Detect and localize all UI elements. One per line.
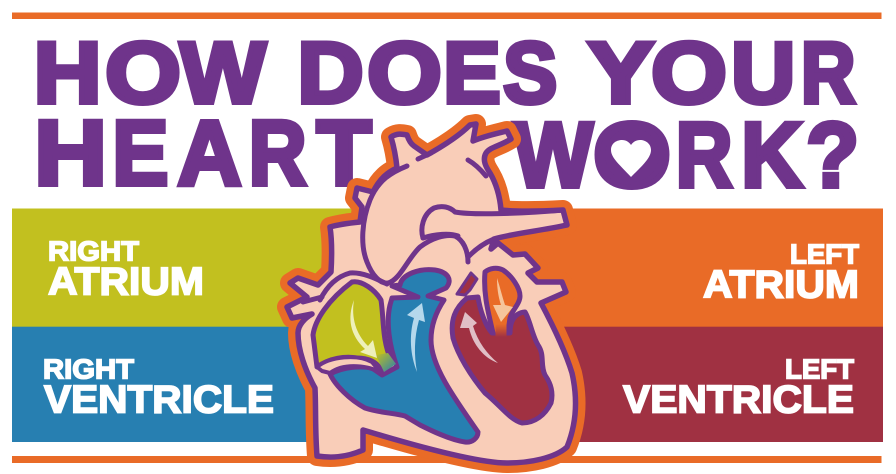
title line two: HEART WORK?: H: [34, 102, 107, 205]
arrow: right ventricle upward: [407, 303, 425, 372]
title line two: HEART WORK?: ?: [806, 103, 859, 206]
title line one: HOW DOES YOUR: E: [443, 26, 501, 122]
top orange rule: [12, 12, 882, 19]
title line one: HOW DOES YOUR: D: [298, 25, 364, 121]
title line one: HOW DOES YOUR: S: [503, 24, 557, 121]
title line two: HEART WORK?: A: [178, 102, 242, 205]
title line one: HOW DOES YOUR: O: [105, 26, 181, 121]
icon: heart inside the letter O: [605, 128, 659, 182]
panel: left atrium: [452, 208, 883, 327]
title line one: HOW DOES YOUR: R: [801, 26, 855, 122]
heart body: [287, 124, 576, 463]
title line one: HOW DOES YOUR: [34, 24, 855, 122]
panel: left ventricle: [452, 327, 883, 442]
arrow: left ventricle upward: [460, 312, 498, 363]
title line one: HOW DOES YOUR: W: [180, 25, 266, 121]
panel: right atrium: ATRIUM: [48, 260, 204, 304]
chamber: left atrium (orange): [485, 268, 520, 337]
panel: left atrium: LEFT: [790, 238, 859, 270]
title line two: HEART WORK?: [34, 101, 859, 207]
title line two: HEART WORK?: T: [317, 102, 371, 205]
heart illustration: [287, 124, 576, 463]
title line one: HOW DOES YOUR: H: [34, 26, 101, 122]
title line two: HEART WORK?: E: [112, 101, 168, 204]
pink tricuspid flap: [317, 357, 381, 373]
panel: right atrium: RIGHT: [48, 236, 139, 266]
title line one: HOW DOES YOUR: O: [367, 26, 442, 121]
title line one: HOW DOES YOUR: Y: [588, 25, 654, 121]
title line two: HEART WORK?: R: [676, 105, 732, 207]
panel: right atrium: [12, 208, 452, 327]
title line two: HEART WORK?: K: [741, 103, 803, 206]
panel: left ventricle: LEFT: [785, 354, 854, 384]
panel: left ventricle: VENTRICLE: [623, 378, 854, 422]
aorta and pulmonary artery outlines: [303, 153, 563, 302]
panel: right ventricle: VENTRICLE: [44, 378, 274, 422]
panel: left atrium: ATRIUM: [703, 264, 859, 306]
chamber: left ventricle (dark red): [452, 297, 552, 423]
title line one: HOW DOES YOUR: O: [651, 26, 727, 121]
title line two: HEART WORK?: W: [513, 103, 593, 206]
panel: right ventricle: RIGHT: [43, 354, 134, 384]
arrow: right atrium to right ventricle: [350, 300, 377, 358]
bottom orange rule: [12, 456, 882, 463]
title line two: HEART WORK?: O: [593, 104, 671, 207]
green to blue valve opening: [376, 353, 396, 372]
chamber: right atrium (green): [313, 282, 391, 371]
chamber: right ventricle (blue): [330, 270, 478, 442]
arrow: left atrium downward: [493, 278, 513, 322]
title line two: HEART WORK?: R: [249, 102, 306, 205]
heart orange halo: [287, 124, 576, 463]
panel: right ventricle: [12, 327, 452, 442]
left ventricle upper wedge: [457, 273, 477, 295]
title line one: HOW DOES YOUR: U: [731, 26, 795, 121]
title: [34, 24, 859, 207]
